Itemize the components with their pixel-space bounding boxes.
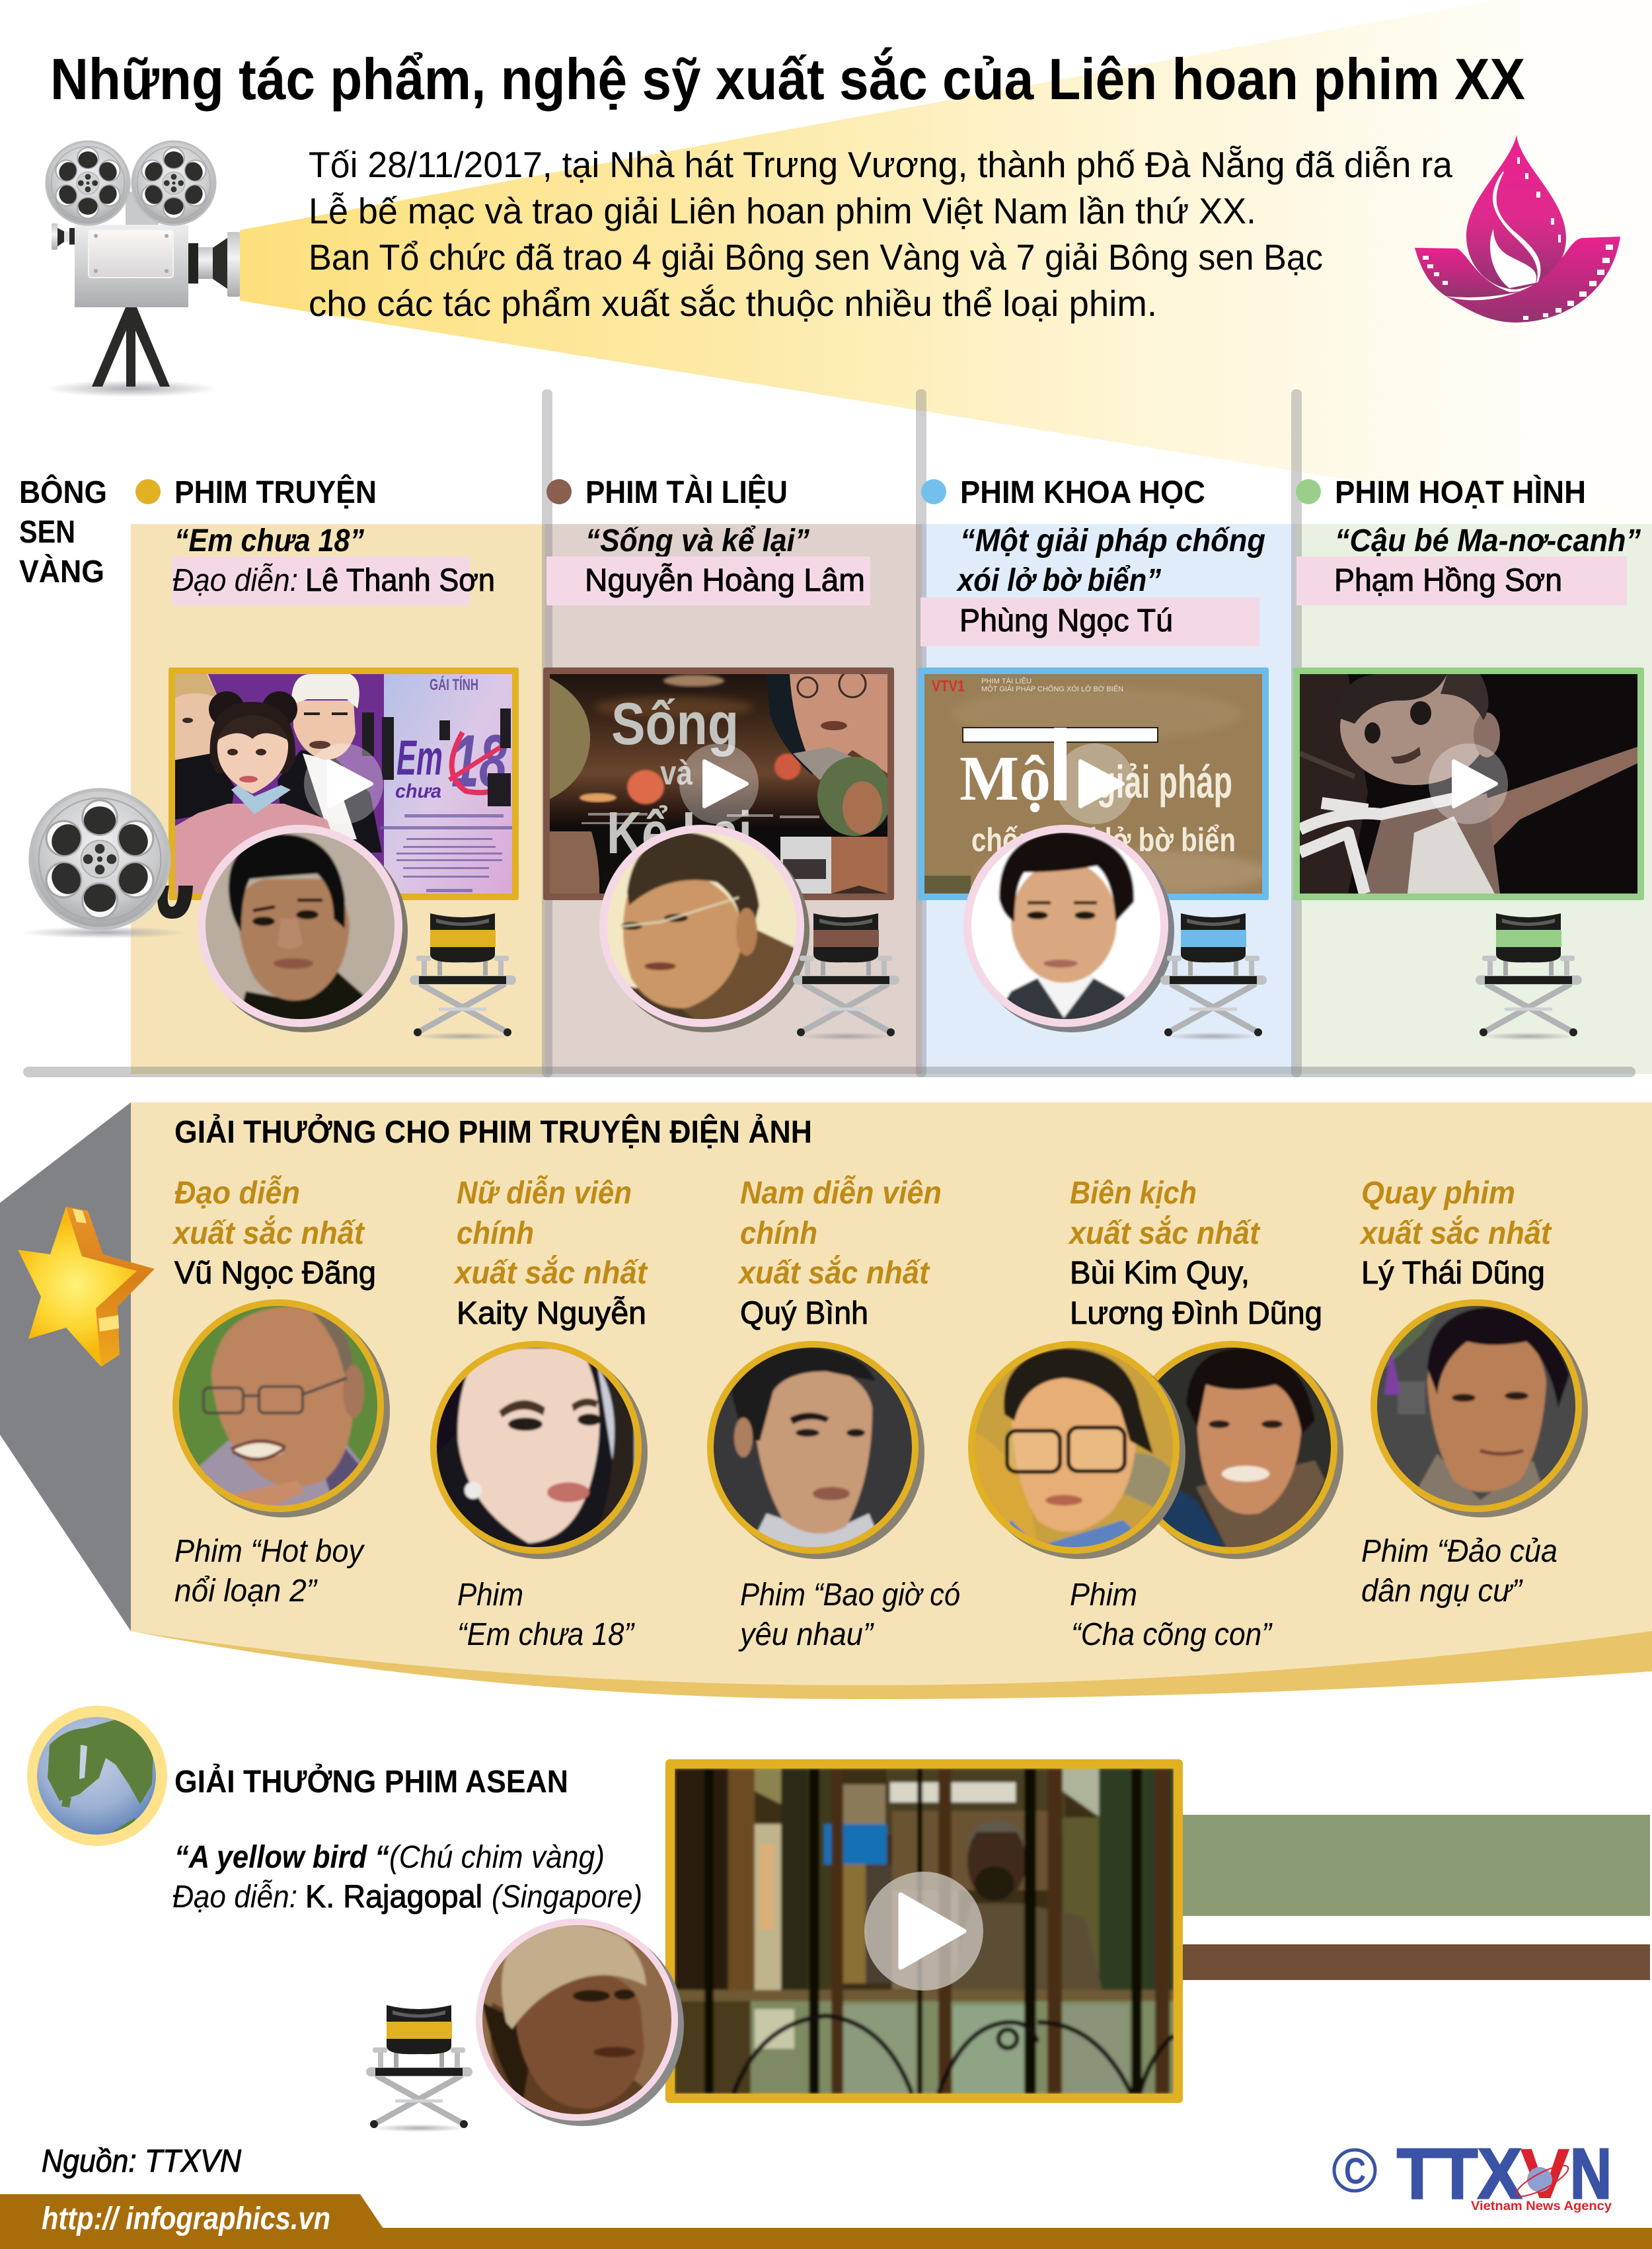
award: best screenplay: Lương Đình Dũng: [1070, 1296, 1322, 1331]
award: best director: Đạo diễn: [174, 1175, 300, 1211]
award: best actress: Nữ diễn viên: [457, 1175, 632, 1211]
award: best actress: Phim: [457, 1578, 523, 1613]
award: best actor: yêu nhau”: [738, 1617, 874, 1652]
portrait: K. Rajagopal: [476, 1919, 684, 2126]
icon: director chair, ASEAN: [366, 2005, 472, 2132]
title: Những tác phẩm, nghệ sỹ xuất sắc của Liên hoan phim XX: [50, 46, 1525, 112]
award: best cinematography: Quay phim: [1361, 1176, 1515, 1211]
video frame: Một giải pháp chống xói lở bờ biển: MỘT GIẢI PHÁP CHỐNG XÓI LỞ BỜ BIỂN: [981, 684, 1123, 693]
poster title text: chưa: [395, 781, 441, 802]
heading: Bông sen vàng: SEN: [19, 515, 75, 550]
video frame: Một giải pháp chống xói lở bờ biển: VTV1: [932, 677, 965, 695]
film credit: A yellow bird: (Chú chim vàng): [389, 1840, 605, 1875]
award: best actor: Phim “Bao giờ có: [740, 1578, 960, 1613]
intro text block: [309, 144, 1452, 324]
film credit: Sống và kể lại: [546, 523, 870, 605]
heading: Bông sen vàng: BÔNG: [19, 474, 107, 510]
panel: phim tài liệu background: [545, 524, 922, 1074]
video frame: Em chưa 18 poster: [169, 667, 519, 900]
source: Nguồn: TTXVN: [42, 2144, 241, 2179]
award: best director: nổi loạn 2”: [174, 1574, 318, 1609]
award: best director: xuất sắc nhất: [171, 1215, 365, 1251]
video frame: Một giải pháp chống xói lở bờ biển: PHIM TÀI LIỆU: [981, 677, 1032, 685]
award: best actor: [707, 1175, 960, 1652]
film credit: Một giải pháp chống xói lở bờ biển: “Một giải pháp chống: [960, 523, 1265, 558]
logo: copyright TTXVN: TTX: [1397, 2133, 1522, 2213]
icon: globe: [27, 1706, 167, 1846]
award: best screenplay: Bùi Kim Quy,: [1070, 1256, 1250, 1291]
video frame: Sống và kể lại: và: [660, 754, 693, 792]
award: best director: [171, 1175, 390, 1609]
film credit: Cậu bé Ma-nơ-canh: Phạm Hồng Sơn: [1334, 563, 1562, 598]
heading: ASEAN film award: GIẢI THƯỞNG PHIM ASEAN: [174, 1763, 568, 1800]
film credit: Em chưa 18: [172, 523, 495, 605]
intro text block: Lễ bế mạc và trao giải Liên hoan phim Việt Nam lần thứ XX.: [309, 190, 1256, 231]
brown bar: [1183, 1944, 1650, 1980]
video frame: A yellow bird: [665, 1759, 1183, 2103]
icon: lotus film logo: [1415, 135, 1620, 323]
film credit: Một giải pháp chống xói lở bờ biển: Phùng Ngọc Tú: [959, 603, 1173, 638]
poster title text: [395, 731, 507, 798]
category: phim tài liệu: PHIM TÀI LIỆU: [585, 474, 788, 510]
icon: director chair, blue: [1160, 913, 1267, 1040]
award: best actor: xuất sắc nhất: [737, 1254, 930, 1291]
icon: director chair, green: [1476, 913, 1582, 1040]
panel: phim truyện background: [131, 524, 545, 1074]
award: best cinematography: Phim “Đảo của: [1361, 1534, 1558, 1569]
award: best actor: chính: [740, 1216, 817, 1251]
award: best actress: Kaity Nguyễn: [457, 1295, 646, 1331]
film credit: A yellow bird: (Singapore): [492, 1880, 642, 1915]
panel: gray side wedge: [0, 1102, 131, 1631]
award: best cinematography: Lý Thái Dũng: [1361, 1256, 1545, 1291]
film credit: A yellow bird: “A yellow bird “: [174, 1840, 389, 1875]
icon: film projector: [46, 141, 240, 397]
right actor: [278, 674, 382, 853]
category: phim truyện: PHIM TRUYỆN: [174, 474, 377, 510]
award: best cinematography: dân ngụ cư”: [1361, 1574, 1523, 1609]
panel: phim hoạt hình background: [1295, 524, 1652, 1074]
video frame: Cậu bé Ma-nơ-canh: [1293, 667, 1644, 900]
portrait: Phùng Ngọc Tú: [963, 825, 1174, 1032]
girl: [175, 691, 344, 894]
award: best actress: chính: [457, 1216, 534, 1251]
footer bar: [0, 2194, 1652, 2249]
category: phim hoạt hình: PHIM HOẠT HÌNH: [1335, 475, 1586, 510]
film credit: A yellow bird: [172, 1840, 642, 1915]
film credit: Em chưa 18: Lê Thanh Sơn: [305, 563, 495, 598]
logo: copyright TTXVN: V: [1520, 2133, 1570, 2213]
portrait: Lê Thanh Sơn: [198, 825, 408, 1032]
footer bar: http:// infographics.vn: [42, 2201, 330, 2236]
heading: Bông sen vàng: VÀNG: [19, 554, 104, 590]
film credit: Cậu bé Ma-nơ-canh: [1296, 523, 1641, 605]
video frame: Một giải pháp chống xói lở bờ biển: giải pháp: [1097, 756, 1232, 808]
award: best screenplay: Phim: [1070, 1578, 1137, 1613]
video frame: Em chưa 18 poster: GÁI TÍNH: [430, 675, 478, 694]
film credit: Một giải pháp chống xói lở bờ biển: [920, 523, 1265, 646]
award: best actress: [430, 1175, 648, 1652]
award: best actress: xuất sắc nhất: [453, 1254, 648, 1291]
heading: feature film awards: GIẢI THƯỞNG CHO PHIM TRUYỆN ĐIỆN ẢNH: [174, 1114, 812, 1150]
icon: director chair, gold: [410, 913, 516, 1040]
video frame: Một giải pháp chống xói lở bờ biển: [918, 667, 1269, 900]
logo: copyright TTXVN: Vietnam News Agency: [1471, 2199, 1612, 2213]
green bar: [1183, 1815, 1650, 1916]
film credit: Cậu bé Ma-nơ-canh: “Cậu bé Ma-nơ-canh”: [1335, 523, 1641, 558]
video frame: Sống và kể lại: Kể Lại: [607, 800, 752, 866]
award: best cinematography: [1359, 1176, 1588, 1609]
heading: Bông sen vàng: [19, 474, 107, 590]
award: best actor: Quý Bình: [740, 1296, 868, 1331]
intro text block: Ban Tổ chức đã trao 4 giải Bông sen Vàng và 7 giải Bông sen Bạc: [309, 237, 1323, 278]
logo: copyright TTXVN: [1334, 2133, 1612, 2213]
film credit: Sống và kể lại: Nguyễn Hoàng Lâm: [585, 562, 865, 598]
poster title text: Em: [396, 730, 443, 785]
film credit: Một giải pháp chống xói lở bờ biển: xói lở bờ biển”: [956, 563, 1161, 598]
film credit: Em chưa 18: “Em chưa 18”: [174, 523, 364, 558]
panel: phim khoa học background: [922, 524, 1295, 1074]
film credit: A yellow bird: Đạo diễn:: [172, 1880, 297, 1915]
icon: film reel: [22, 790, 193, 938]
portrait: Nguyễn Hoàng Lâm: [599, 825, 809, 1032]
icon: director chair, brown: [793, 913, 899, 1040]
logo: copyright TTXVN: N: [1570, 2133, 1612, 2213]
panel: feature film awards: [131, 1102, 1652, 1685]
award: best actress: “Em chưa 18”: [457, 1617, 635, 1652]
logo: copyright TTXVN: C: [1344, 2150, 1366, 2192]
award: best director: Phim “Hot boy: [174, 1534, 365, 1569]
left actor: [175, 674, 235, 820]
award: best screenplay: “Cha cõng con”: [1071, 1617, 1273, 1652]
video frame: Một giải pháp chống xói lở bờ biển: chống xói lở bờ biển: [971, 821, 1236, 858]
video frame: Một giải pháp chống xói lở bờ biển: Mộ: [959, 743, 1051, 814]
award: best screenplay: xuất sắc nhất: [1067, 1215, 1261, 1251]
category: phim khoa học: PHIM KHOA HỌC: [960, 475, 1205, 510]
award: best cinematography: xuất sắc nhất: [1359, 1215, 1552, 1251]
award: best screenplay: Biên kịch: [1070, 1176, 1197, 1211]
video frame: Sống và kể lại: [543, 667, 894, 900]
video frame: Sống và kể lại: Sống: [611, 691, 739, 757]
intro text block: Tối 28/11/2017, tại Nhà hát Trưng Vương, thành phố Đà Nẵng đã diễn ra: [309, 144, 1452, 185]
award: best actor: Nam diễn viên: [740, 1175, 942, 1211]
award: best screenplay: [965, 1176, 1343, 1652]
film credit: Sống và kể lại: “Sống và kể lại”: [585, 523, 809, 558]
poster title text: 18: [451, 720, 507, 802]
award: best director: Vũ Ngọc Đãng: [174, 1256, 376, 1291]
panel: gold band under feature awards: [131, 1631, 1652, 1699]
film credit: A yellow bird: K. Rajagopal: [305, 1880, 482, 1915]
intro text block: cho các tác phẩm xuất sắc thuộc nhiều thể loại phim.: [309, 283, 1157, 324]
icon: gold star: [18, 1207, 155, 1367]
projector light beam: [240, 0, 1652, 529]
film credit: Em chưa 18: Đạo diễn:: [172, 563, 298, 598]
